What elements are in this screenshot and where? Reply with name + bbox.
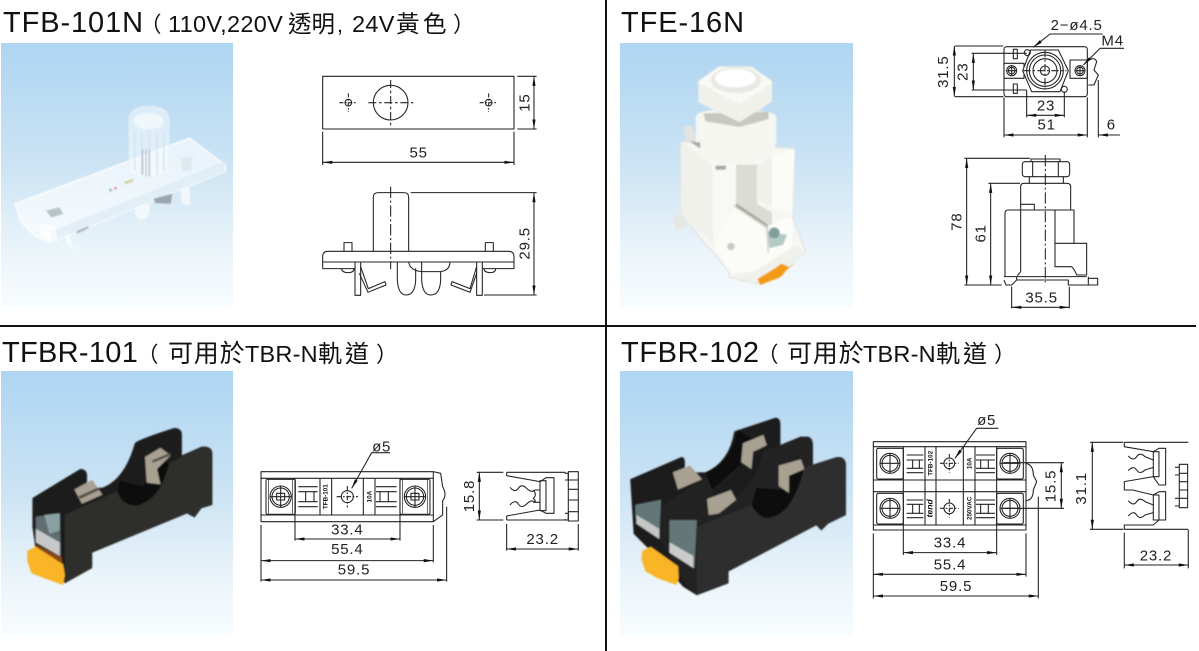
dimension: 23.2: 23.2 (526, 531, 559, 548)
title: TFBR-101: TBR-N (245, 341, 318, 367)
leader label: ø5: ø5 (977, 412, 996, 429)
dimension: 31.1: 31.1 (1073, 472, 1090, 505)
dimension: 55: 55 (409, 144, 428, 161)
photo: TFE-16N white fuse holder (620, 43, 853, 308)
body marking: 10A: 10A (967, 457, 974, 469)
title: TFBR-102 (621, 337, 1016, 369)
body marking: TFB-102: TFB-102 (927, 450, 934, 476)
title: TFB-101N: , (337, 13, 343, 37)
title: TFB-101N: ） (453, 13, 475, 37)
title: TFBR-101: 軌 (318, 341, 342, 368)
title: TFB-101N: 黃 (396, 11, 420, 37)
vertical divider (605, 0, 607, 651)
drawing: TFE-16N side view (948, 155, 1098, 308)
dimension: 59.5: 59.5 (338, 561, 370, 578)
title: TFB-101N: 色 (423, 11, 446, 37)
title: TFBR-102: 軌 (936, 341, 960, 368)
dimension: 55.4: 55.4 (331, 541, 364, 558)
dimension: 51: 51 (1037, 116, 1056, 133)
dimension: 23 vertical: 23 (955, 62, 972, 81)
title: TFBR-102: TFBR-102 (621, 337, 760, 369)
photo: TFB-101N transparent indicator (1, 43, 233, 308)
dimension: 33.4: 33.4 (331, 521, 364, 538)
title: TFBR-102: TBR-N (863, 341, 936, 367)
title: TFBR-101: TFBR-101 (2, 337, 138, 369)
title: TFBR-101: （ (137, 343, 159, 367)
horizontal divider (0, 325, 1196, 327)
drawing: TFE-16N top view (935, 17, 1124, 137)
leader label: ø5: ø5 (372, 439, 391, 456)
dimension: 15: 15 (516, 93, 533, 112)
dimension: 23 horizontal: 23 (1037, 98, 1055, 115)
leader label: M4: M4 (1101, 32, 1124, 49)
drawing: TFBR-102 top view (873, 412, 1064, 598)
dimension: 59.5: 59.5 (940, 578, 972, 595)
dimension: 15.8: 15.8 (461, 480, 478, 512)
title: TFBR-102: （ (757, 343, 779, 367)
title: TFBR-101: 道 (345, 341, 369, 368)
drawing: TFBR-101 top view (261, 439, 447, 582)
title: TFBR-101 (2, 337, 398, 369)
title: TFB-101N: 24V (352, 11, 395, 37)
title: TFB-101N: （ (140, 13, 162, 37)
dimension: 29.5: 29.5 (516, 227, 533, 260)
body marking: 10A: 10A (366, 490, 373, 502)
body marking: TFB-101: TFB-101 (323, 484, 330, 509)
title: TFB-101N: 110V,220V (168, 11, 283, 37)
drawing: TFBR-102 side view (1073, 442, 1188, 568)
dimension: 35.5: 35.5 (1025, 289, 1058, 306)
body marking: tend: tend (925, 498, 935, 517)
dimension: 33.4: 33.4 (934, 534, 966, 551)
photo: TFBR-101 black fuse holder (1, 371, 233, 636)
dimension: 6: 6 (1107, 116, 1116, 133)
dimension: 78: 78 (948, 212, 965, 231)
drawing: TFB-101N side view (323, 187, 537, 295)
drawing: TFBR-101 side view (461, 472, 578, 551)
title: TFE-16N: TFE-16N (621, 7, 745, 39)
leader label: 2-ø4.5: 2−ø4.5 (1051, 17, 1103, 34)
title: TFBR-101: ） (376, 343, 398, 367)
title: TFB-101N: TFB-101N (3, 7, 144, 39)
title: TFBR-102: 可用於 (787, 340, 864, 368)
dimension: 31.5: 31.5 (935, 55, 952, 88)
title: TFBR-102: 道 (963, 341, 987, 368)
title: TFBR-102: ） (994, 343, 1016, 367)
body marking: 250VAC: 250VAC (967, 496, 974, 520)
dimension: 61: 61 (972, 224, 989, 242)
dimension: 15.5: 15.5 (1042, 470, 1059, 502)
photo: TFBR-102 double black fuse holder (620, 371, 853, 636)
dimension: 55.4: 55.4 (934, 556, 966, 573)
title: TFB-101N (3, 7, 475, 39)
title: TFBR-101: 可用於 (168, 340, 245, 368)
drawing: TFB-101N top view (323, 76, 537, 165)
dimension: 23.2: 23.2 (1140, 548, 1172, 565)
title: TFB-101N: 透明 (288, 11, 335, 37)
